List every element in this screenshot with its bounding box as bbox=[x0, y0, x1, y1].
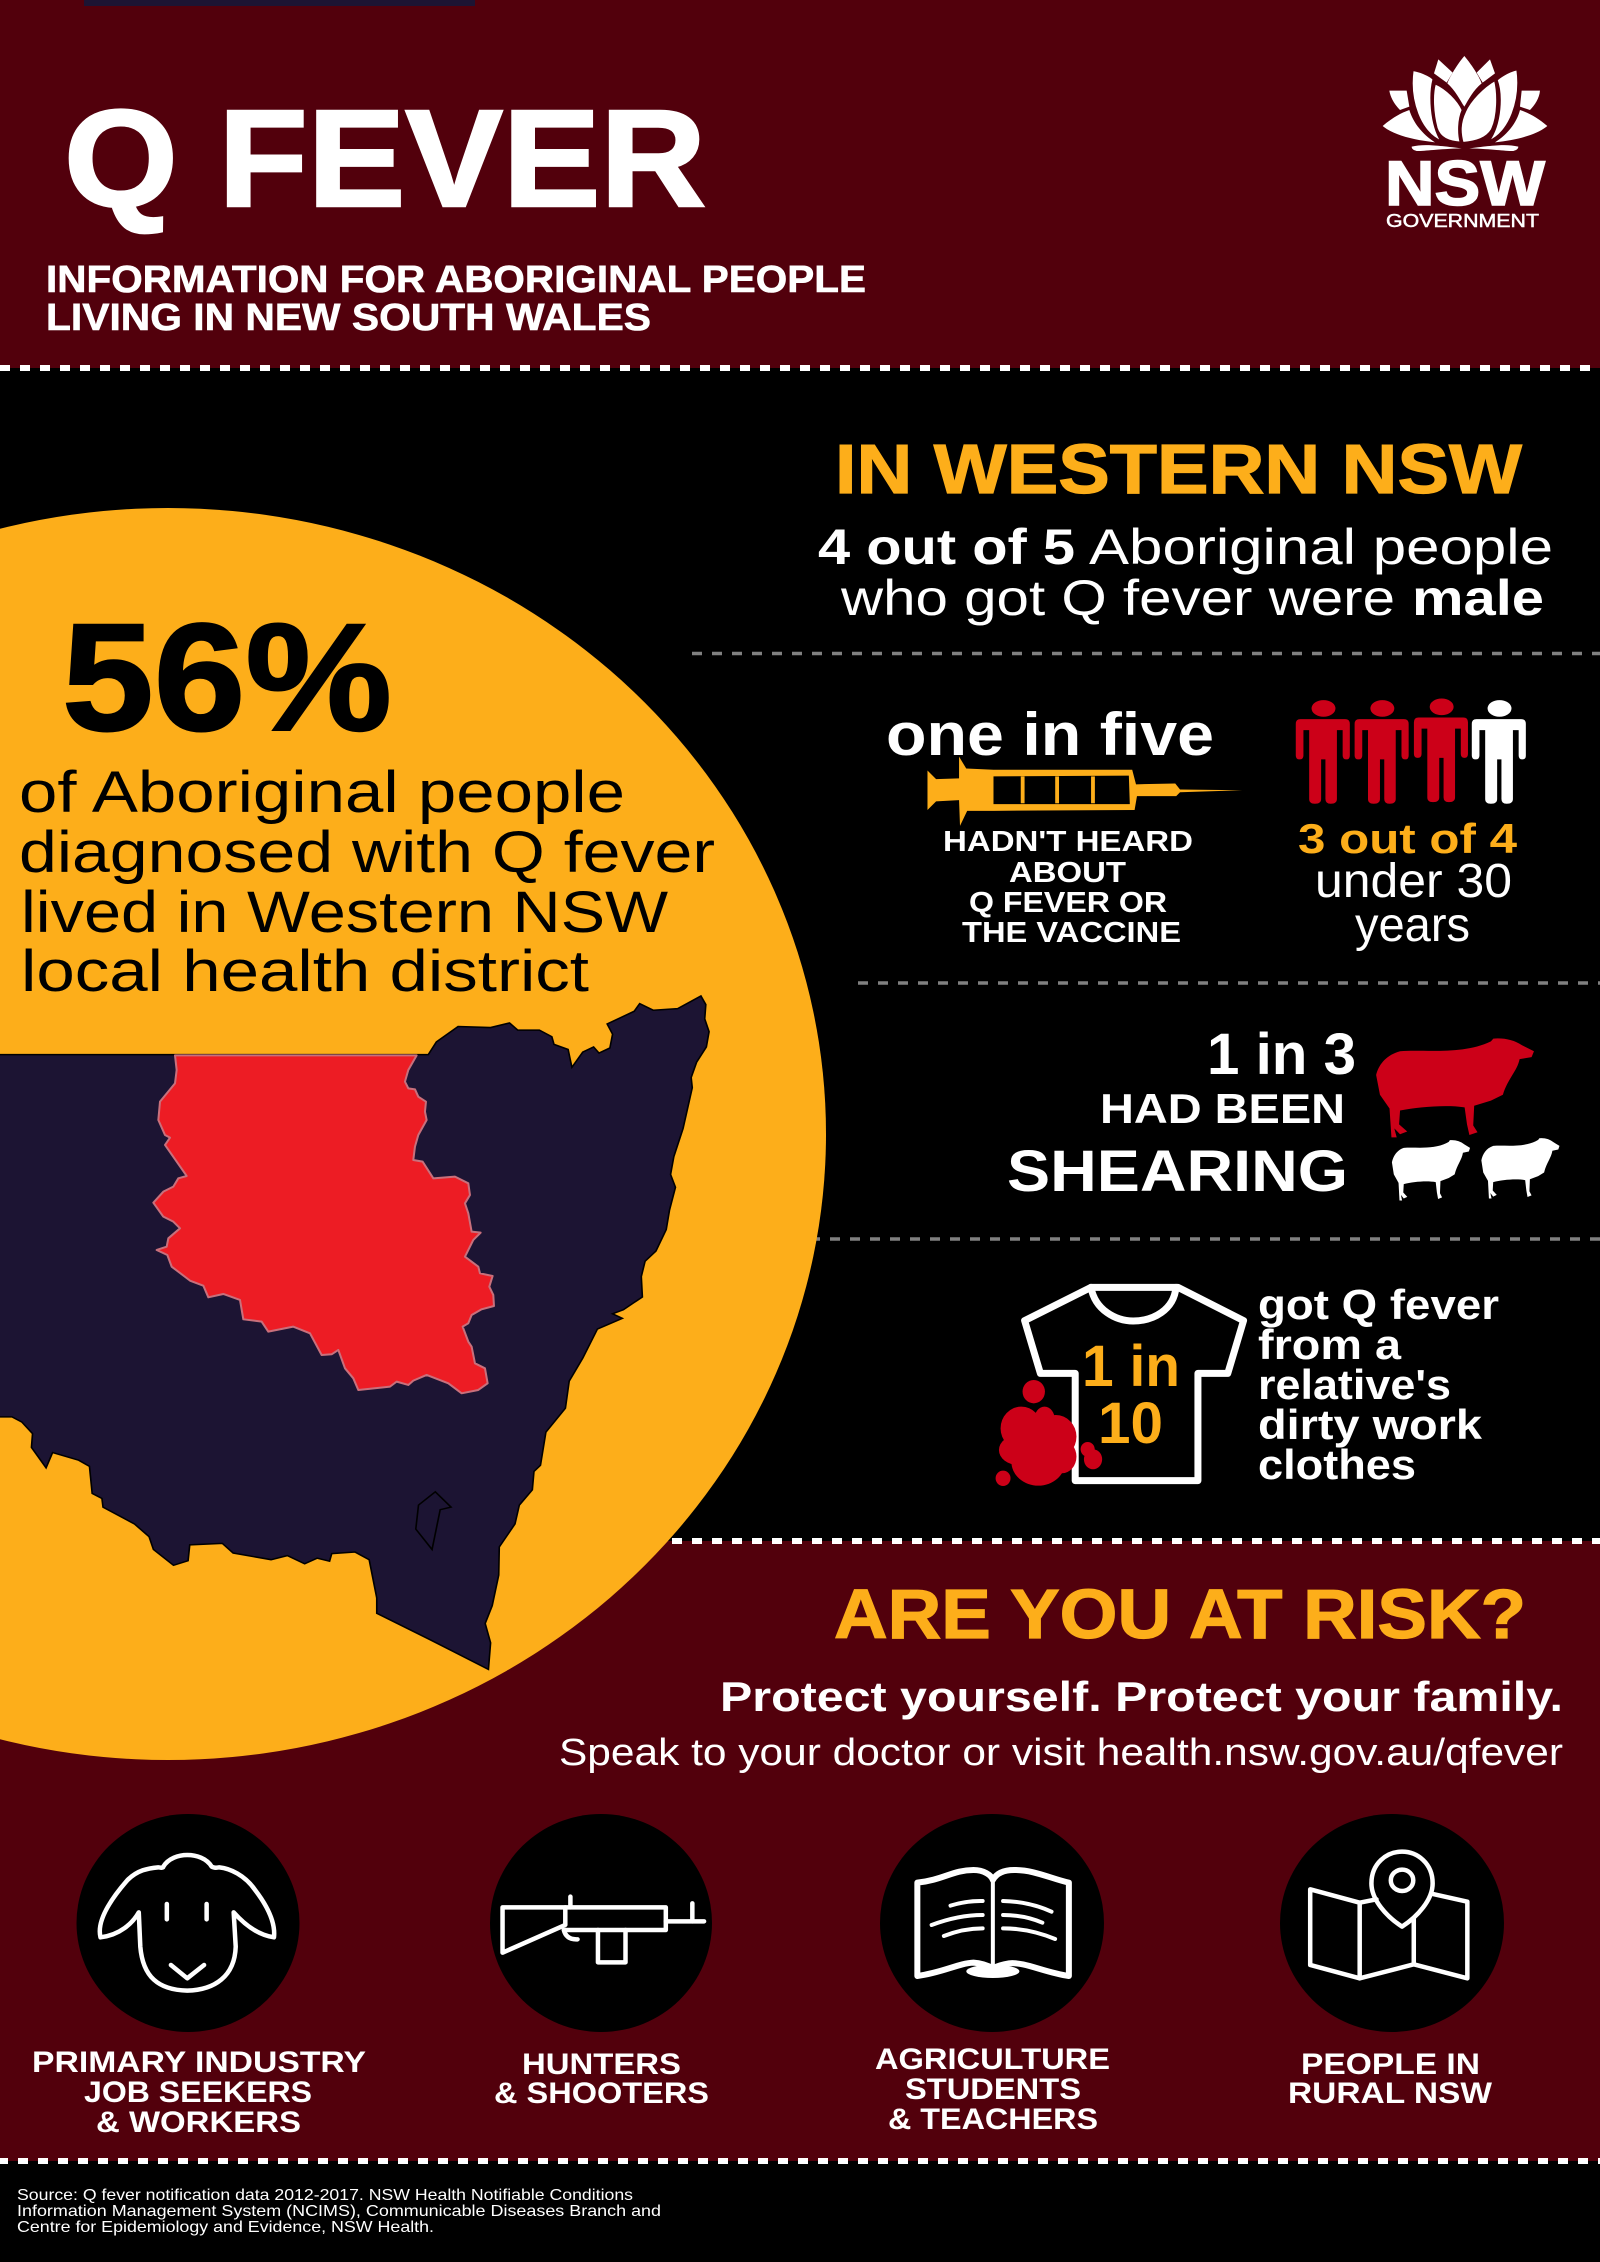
text: under 30 years bbox=[1315, 855, 1512, 952]
label: agriculture: STUDENTS bbox=[905, 2073, 1081, 2106]
group: hunters bbox=[490, 1814, 712, 2110]
stat: 56 percent: 56% bbox=[62, 592, 392, 763]
map: New South Wales bbox=[0, 996, 709, 1669]
stat: 1 in 3 shearing bbox=[1007, 1022, 1356, 1204]
source note: Information Management System (NCIMS), Communicable Diseases Branch and bbox=[17, 2203, 661, 2220]
icon: rifle bbox=[503, 1897, 704, 1962]
text: 56 percent description: of Aboriginal people bbox=[19, 760, 625, 825]
heading: in Western NSW: IN WESTERN NSW bbox=[835, 430, 1522, 508]
panel: big yellow circle bbox=[0, 508, 826, 1760]
icon circle: sheep head bbox=[76, 1814, 300, 2032]
subtitle: INFORMATION FOR ABORIGINAL PEOPLE bbox=[46, 259, 866, 301]
subtitle bbox=[46, 259, 866, 339]
text: relative's dirty work clothes: relative's bbox=[1258, 1361, 1451, 1408]
text: under 30 years: years bbox=[1355, 899, 1470, 952]
text: under 30 years: under 30 bbox=[1315, 855, 1512, 908]
label: agriculture: AGRICULTURE bbox=[875, 2043, 1110, 2076]
text: 4 out of 5: 4 out of 5 bbox=[818, 519, 1075, 575]
text: relative's dirty work clothes bbox=[1258, 1281, 1499, 1488]
icon circle: rifle bbox=[490, 1814, 712, 2032]
text: hadn't heard: ABOUT bbox=[1009, 857, 1126, 889]
label: agriculture bbox=[875, 2043, 1110, 2136]
top navy sliver bbox=[84, 0, 475, 6]
icon circle: book bbox=[880, 1814, 1104, 2032]
label: rural NSW bbox=[1288, 2048, 1493, 2110]
icon: three sheep bbox=[1376, 1038, 1559, 1200]
text: 56 percent description bbox=[19, 760, 715, 1004]
shirt outline bbox=[1025, 1287, 1244, 1481]
label: primary industry: JOB SEEKERS bbox=[84, 2076, 312, 2109]
text: 56 percent description: local health district bbox=[21, 939, 589, 1004]
icon: waratah bbox=[1383, 56, 1547, 151]
person 3 bbox=[1414, 699, 1468, 802]
white sheep 2 bbox=[1481, 1138, 1559, 1199]
logo wordmark: NSW bbox=[1385, 149, 1546, 219]
icon circle: map bbox=[1280, 1814, 1504, 2032]
person 2 bbox=[1355, 700, 1409, 804]
icon: map and pin bbox=[1310, 1852, 1467, 1978]
text: hadn't heard: THE VACCINE bbox=[962, 917, 1181, 949]
group: primary industry bbox=[32, 1814, 366, 2139]
stat: 3 out of 4: 3 out of 4 bbox=[1298, 815, 1518, 862]
label: primary industry bbox=[32, 2046, 366, 2139]
stat: 1 in 10: 10 bbox=[1098, 1391, 1163, 1456]
panel: risk band bbox=[0, 1541, 1600, 2161]
icon: four people bbox=[1296, 699, 1526, 804]
stain bbox=[996, 1380, 1102, 1486]
label: primary industry: PRIMARY INDUSTRY bbox=[32, 2046, 366, 2079]
panel: header band bbox=[0, 0, 1600, 368]
stat: 1 in 3 shearing: 1 in 3 bbox=[1207, 1022, 1356, 1087]
stat: 1 in 3 shearing: SHEARING bbox=[1007, 1139, 1348, 1204]
state outline bbox=[0, 996, 709, 1669]
stat: 1 in 3 shearing: HAD BEEN bbox=[1100, 1085, 1345, 1132]
Australian Capital Territory bbox=[416, 1492, 451, 1549]
red sheep bbox=[1376, 1038, 1534, 1137]
Western NSW district bbox=[153, 1055, 494, 1393]
text: 4 out of 5 bbox=[818, 519, 1553, 626]
group: agriculture bbox=[875, 1814, 1110, 2136]
source note: Centre for Epidemiology and Evidence, NSW Health. bbox=[17, 2219, 434, 2236]
icon: t-shirt with stain bbox=[996, 1287, 1244, 1486]
label: primary industry: & WORKERS bbox=[96, 2106, 301, 2139]
logo: NSW Government bbox=[1383, 56, 1547, 231]
label: rural NSW: RURAL NSW bbox=[1288, 2077, 1493, 2110]
label: hunters: & SHOOTERS bbox=[494, 2077, 709, 2110]
logo government: GOVERNMENT bbox=[1386, 211, 1539, 231]
label: hunters: HUNTERS bbox=[522, 2048, 681, 2081]
text: protect yourself: Protect yourself. Protect your family. bbox=[720, 1673, 1563, 1720]
title: Q FEVER bbox=[64, 82, 706, 236]
text: speak to your doctor: Speak to your doctor or visit health.nsw.gov.au/qfever bbox=[559, 1732, 1563, 1774]
label: rural NSW: PEOPLE IN bbox=[1301, 2048, 1480, 2081]
person 4 bbox=[1472, 700, 1526, 804]
text: 56 percent description: lived in Western NSW bbox=[21, 880, 668, 945]
text: relative's dirty work clothes: from a bbox=[1258, 1321, 1402, 1368]
icon: open book bbox=[917, 1870, 1069, 1978]
text: hadn't heard: Q FEVER OR bbox=[969, 887, 1167, 919]
label: agriculture: & TEACHERS bbox=[888, 2103, 1098, 2136]
text: hadn't heard: HADN'T HEARD bbox=[943, 826, 1193, 858]
source note: Source: Q fever notification data 2012-2017. NSW Health Notifiable Conditions bbox=[17, 2187, 633, 2204]
stat: 1 in 10: 1 in bbox=[1082, 1334, 1180, 1399]
icon: syringe bbox=[927, 757, 1242, 826]
icon: sheep head bbox=[100, 1855, 274, 1991]
text: 4 out of 5: male bbox=[1412, 570, 1544, 626]
text: 4 out of 5: who got Q fever were bbox=[840, 570, 1395, 626]
heading: are you at risk: ARE YOU AT RISK? bbox=[834, 1575, 1526, 1653]
person 1 bbox=[1296, 700, 1350, 804]
group: rural NSW bbox=[1280, 1814, 1504, 2110]
stat: one in five: one in five bbox=[886, 701, 1214, 768]
text: relative's dirty work clothes: dirty work bbox=[1258, 1401, 1483, 1448]
text: hadn't heard bbox=[943, 826, 1193, 949]
text: relative's dirty work clothes: got Q fever bbox=[1258, 1281, 1499, 1328]
text: 4 out of 5: Aboriginal people bbox=[1089, 519, 1553, 575]
text: 56 percent description: diagnosed with Q fever bbox=[19, 820, 715, 885]
source note bbox=[17, 2187, 661, 2236]
text: relative's dirty work clothes: clothes bbox=[1258, 1441, 1416, 1488]
white sheep 1 bbox=[1392, 1140, 1470, 1200]
stat: 1 in 10 bbox=[1082, 1334, 1180, 1456]
label: hunters bbox=[494, 2048, 709, 2110]
subtitle: LIVING IN NEW SOUTH WALES bbox=[46, 297, 651, 339]
